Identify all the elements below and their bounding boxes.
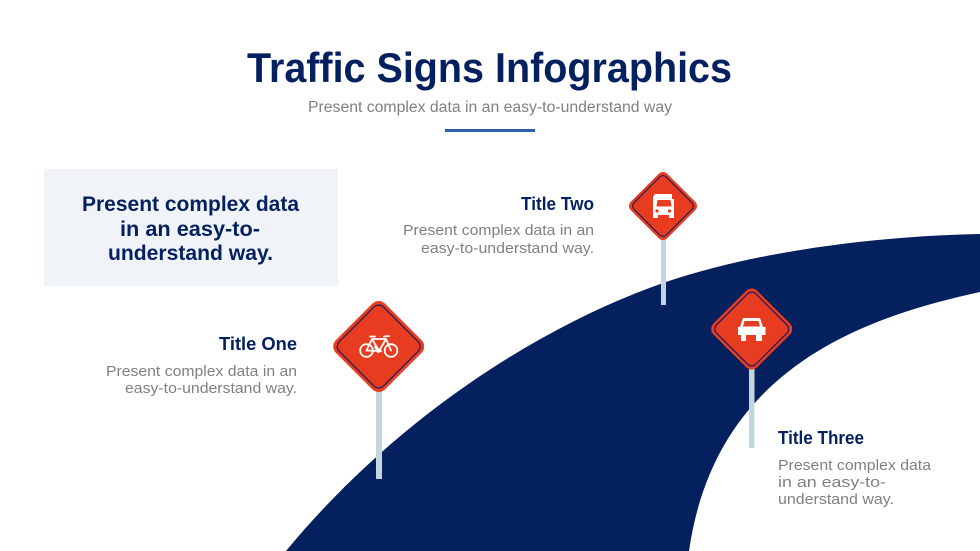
text block: title two: Present complex data in an xyxy=(403,222,594,239)
text block: title three: Present complex data xyxy=(778,457,932,474)
text block: title two xyxy=(403,194,594,257)
panel: callout: understand way. xyxy=(108,242,273,265)
icon: truck xyxy=(653,194,674,218)
sign two: truck xyxy=(627,170,699,305)
icon: car xyxy=(738,318,766,341)
text block: title one xyxy=(106,334,297,397)
text block: title three: in an easy-to- xyxy=(778,474,886,491)
title: Traffic Signs Infographics xyxy=(247,44,732,91)
text block: title three xyxy=(778,428,932,508)
panel: callout: Present complex data xyxy=(82,193,299,216)
text block: title three: understand way. xyxy=(778,491,894,508)
sign one: bicycle xyxy=(329,297,428,479)
text block: title two: easy-to-understand way. xyxy=(421,240,594,257)
sign three: car xyxy=(708,285,796,448)
subtitle: Present complex data in an easy-to-understand way xyxy=(308,99,672,116)
text block: title one: Present complex data in an xyxy=(106,363,297,380)
title underline xyxy=(445,129,535,132)
panel: callout: in an easy-to- xyxy=(120,218,260,241)
panel: callout xyxy=(44,169,338,286)
text block: title one: Title One xyxy=(219,334,297,354)
text block: title three: Title Three xyxy=(778,428,864,448)
text block: title two: Title Two xyxy=(521,194,594,214)
icon: bicycle xyxy=(360,336,397,357)
text block: title one: easy-to-understand way. xyxy=(125,380,297,397)
road curve xyxy=(286,234,980,551)
